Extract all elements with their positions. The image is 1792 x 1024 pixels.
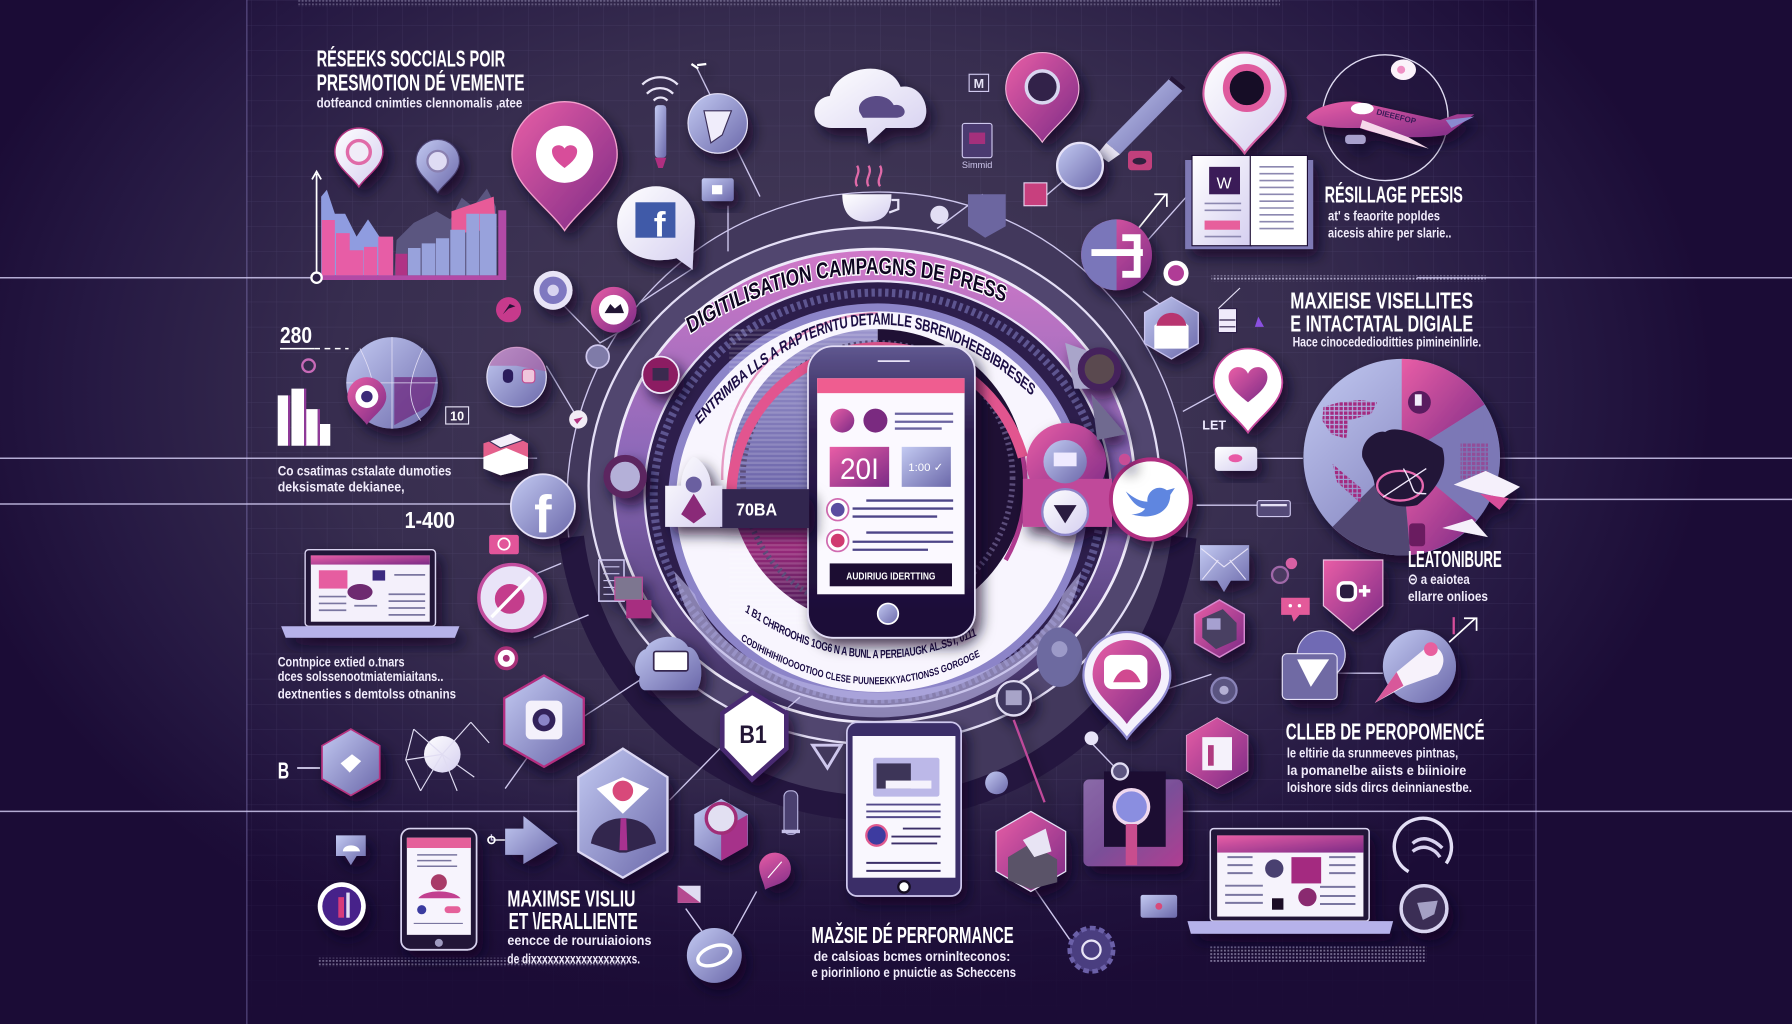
- icon: wifi ring: [1384, 808, 1462, 886]
- text block: cles de performance: [1286, 718, 1485, 796]
- text block: content: dces solssenootmiatemiaitans..: [278, 669, 443, 685]
- text block: content: dextnenties s demtolss otnanins: [278, 686, 456, 702]
- text block: maximise visibilites: [1290, 288, 1481, 350]
- text block: performance: [811, 922, 1016, 981]
- icon: books: [483, 433, 528, 475]
- text block: leatoribure: ⊝ a eaiotea: [1408, 572, 1471, 588]
- network connectors: [491, 69, 1383, 949]
- icon: node lilac: [985, 771, 1008, 794]
- ring lower text: CODIHIHIHIIOOOOTIOO CLESE PUUNEEKKYACTIONSS GORGOGE: [742, 634, 980, 684]
- panel: social promotion heading: [317, 45, 525, 111]
- icon: M box: M: [974, 77, 984, 91]
- label: 10 box: [446, 407, 469, 424]
- text block: maximise visibilites: MAXIEISE VISELLITES: [1290, 288, 1473, 314]
- icon: white card: [1215, 447, 1257, 471]
- smartphone: 1:00 ✓: [908, 462, 943, 474]
- icon: pink hexagon: [1186, 718, 1248, 789]
- icon: open book: [1185, 155, 1313, 249]
- ring lower text: 1 B1 CHRROOHIS 1OG6 N A BUNL A PEREIAUGK AL.SST, 0111: [745, 605, 976, 658]
- icon: small pink window: [1024, 183, 1047, 206]
- text block: performance: MAŽSIE DÉ PERFORMANCE: [811, 922, 1014, 948]
- stat: 280: [280, 322, 349, 349]
- icon: wifi pen: [642, 77, 678, 168]
- panel: social promotion heading: PRESMOTION DÉ VEMENTE: [317, 69, 525, 95]
- text block: resillage: at' s feaorite popldes: [1328, 209, 1440, 225]
- icon: buildings hexagon: [1145, 297, 1198, 359]
- icon: pink pin: [591, 287, 637, 333]
- text block: maximise visibility: MAXIMSE VISLIU: [507, 885, 635, 911]
- icon: magnifier pin: [1006, 53, 1079, 142]
- text block: leatoribure: [1408, 546, 1502, 605]
- text block: maximise visibility: ET \/ERALLIENTE: [509, 908, 638, 934]
- text block: performance: de calsioas bcmes orninlteconos:: [814, 949, 1010, 965]
- text block: leatoribure: LEATONIBURE: [1408, 546, 1502, 572]
- ring subtitle: ENTRIMBA LLS A RAPTERNTU DETAMLLE SBRENDHEEBIBRESES: [695, 313, 1036, 424]
- tablet centre bottom: [847, 722, 961, 896]
- icon: small clipboard: Simmid: [962, 160, 992, 170]
- icon: small box: [702, 178, 734, 201]
- icon: small clipboard: [962, 123, 992, 170]
- pie map chart: [1303, 359, 1520, 555]
- icon: lilac device: [1141, 895, 1177, 918]
- text block: content: [278, 654, 456, 702]
- icon: B1 shield: B1: [739, 721, 767, 749]
- icon: lilac avatar circle: [487, 346, 546, 407]
- icon: small bar card: [1257, 501, 1290, 517]
- icon: pink shield: [1323, 560, 1383, 631]
- smartphone: 20I: [840, 453, 879, 486]
- icon: nut hexagon: [694, 799, 748, 861]
- text block: cles de performance: la pomanelbe aiists e biinioire: [1287, 763, 1466, 779]
- icon: airplane in circle: [1306, 55, 1474, 181]
- label: 10 box: 10: [450, 410, 464, 424]
- text block: left middle: Co csatimas cstalate dumoties: [278, 463, 451, 479]
- text block: leatoribure: ellarre onlioes: [1408, 589, 1488, 605]
- text block: maximise visibility: eencce de rouruiaioions: [507, 933, 651, 949]
- text block: resillage: RÉSILLAGE PEESIS: [1325, 181, 1463, 207]
- icon: small red tag: [1128, 151, 1152, 170]
- icon: pen: [1097, 78, 1184, 162]
- icon: small white dot: [569, 410, 587, 429]
- icon: cloud box: [635, 637, 701, 690]
- laptop right: [1187, 829, 1393, 934]
- icon: small cloud card: [336, 835, 366, 865]
- icon: instagram hexagon: [504, 675, 584, 767]
- icon: hexagon B: B: [278, 757, 289, 783]
- laptop left: [281, 550, 459, 638]
- icon: mail card with bubble: [1282, 631, 1345, 699]
- icon: person shield: [578, 749, 667, 878]
- text block: cles de performance: CLLEB DE PEROPOMENCÉ: [1286, 718, 1485, 744]
- icon: speech tab: [930, 194, 1006, 238]
- arrow: up right: [1138, 194, 1167, 229]
- icon: chat bubble: [1281, 598, 1310, 622]
- central rings: [567, 192, 1189, 814]
- icon: hexagon B: [278, 729, 380, 795]
- text block: maximise visibilites: Hace cinocededioditties pimineinlirle.: [1293, 334, 1481, 350]
- icon: small pin with stem: [997, 681, 1045, 802]
- tablet left: [401, 829, 477, 950]
- icon: small spiral and dots: [1272, 558, 1297, 583]
- text block: performance: e piorinliono e pnuictie as Scheccens: [811, 965, 1016, 981]
- icon: facebook circle: f: [534, 486, 552, 545]
- arrow: rocket exhaust: [1449, 617, 1477, 642]
- label: LET: LET: [1202, 419, 1226, 433]
- ring lower text: [742, 605, 980, 684]
- left profile tag: [665, 457, 809, 528]
- left profile tag: 70BA: [736, 499, 777, 519]
- icon: document and arrow: [1218, 288, 1264, 333]
- icon: open book: W: [1216, 176, 1232, 193]
- icon: B1 shield: [722, 693, 786, 779]
- text block: maximise visibility: [507, 885, 651, 967]
- panel: social promotion heading: dotfeancd cnimties clennomalis ,atee: [317, 95, 522, 111]
- icon: M box: [969, 74, 989, 91]
- text block: resillage: [1325, 181, 1463, 242]
- text block: left middle: deksismate dekianee,: [278, 479, 405, 495]
- icon: lilac blob: [1037, 627, 1082, 687]
- icon: lilac location pin: [416, 139, 459, 193]
- icon: lilac funnel circle: [688, 64, 747, 153]
- icon: key: [1085, 731, 1098, 745]
- smartphone: [808, 346, 975, 638]
- icon: orbit circle: [687, 928, 742, 983]
- bar and area chart: [311, 171, 506, 283]
- right twitter tag: [1023, 423, 1191, 539]
- icon: cloud: [815, 69, 926, 144]
- text block: cles de performance: loishore sids dircs deinnianestbe.: [1287, 780, 1472, 796]
- icon: ring pin large: [1203, 53, 1286, 153]
- icon: dark round badge: [1401, 886, 1447, 931]
- icon: white location pin: [335, 128, 383, 187]
- icon: heart pin: [512, 102, 617, 231]
- text block: maximise visibilites: E INTACTATAL DIGIALE: [1290, 310, 1473, 336]
- icon: gear: [1070, 928, 1113, 971]
- text block: content: Contnpice extied o.tnars: [278, 654, 405, 670]
- panel: social promotion heading: RÉSEEKS SOCCIALS POIR: [317, 45, 505, 71]
- text block: left middle: [278, 463, 451, 495]
- icon: small target: [496, 648, 517, 669]
- ring ornaments: [599, 343, 1130, 618]
- icon: plus arrow circle: [1081, 219, 1152, 290]
- stat: 280: 280: [280, 322, 312, 348]
- text block: cles de performance: le eltirie da srunmeeves pintnas,: [1287, 746, 1458, 762]
- icon: heart pin: [1214, 349, 1282, 433]
- text block: maximise visibility: de dixxxxxxxxxxxxxxxxxxs.: [507, 951, 640, 967]
- icon: airplane in circle: DIEEEFOP: [1376, 107, 1418, 126]
- icon: flag card: [678, 886, 701, 903]
- icon: pink tag: [489, 535, 519, 554]
- icon: camera magnifier: [1083, 763, 1183, 866]
- icon: small pink ring: [302, 359, 315, 372]
- arrow: lilac pointer: [488, 816, 558, 864]
- globe: [346, 337, 438, 429]
- icon: facebook circle: [511, 474, 575, 545]
- icon: small pink tag: [496, 297, 521, 322]
- icon: small white badge: [1163, 261, 1189, 286]
- icon: facebook speech bubble: [617, 186, 695, 270]
- mini bar chart: [278, 389, 330, 446]
- icon: box hexagon: [996, 811, 1066, 891]
- icon: prohibition circle: [479, 565, 545, 631]
- icon: envelope tag: [1200, 545, 1249, 592]
- icon: rocket circle: [1375, 630, 1456, 703]
- icon: facebook speech bubble: f: [654, 205, 666, 245]
- icon: machine hexagon: [1195, 600, 1244, 657]
- icon: v shield on ring: [813, 745, 841, 768]
- icon: magnifier circle: [1057, 143, 1103, 189]
- icon: round badge: [318, 882, 366, 930]
- icon: sphere network: [406, 722, 489, 791]
- icon: cylinder: [782, 791, 800, 834]
- icon: large pink pin: [1083, 632, 1170, 738]
- smartphone: AUDIRIUG IDERTTING: [846, 571, 935, 582]
- ring title: DIGITILISATION CAMPAGNS DE PRESS: [684, 255, 1008, 335]
- stat: 1-400: 1-400: [405, 507, 455, 533]
- icon: coffee cup: [842, 166, 898, 222]
- icon: node dot: [586, 345, 609, 368]
- icon: grey dial: [1211, 678, 1237, 703]
- text block: resillage: aicesis ahire per slarie..: [1328, 226, 1451, 242]
- icon: small pin: [751, 847, 796, 896]
- icon: disc: [534, 271, 573, 310]
